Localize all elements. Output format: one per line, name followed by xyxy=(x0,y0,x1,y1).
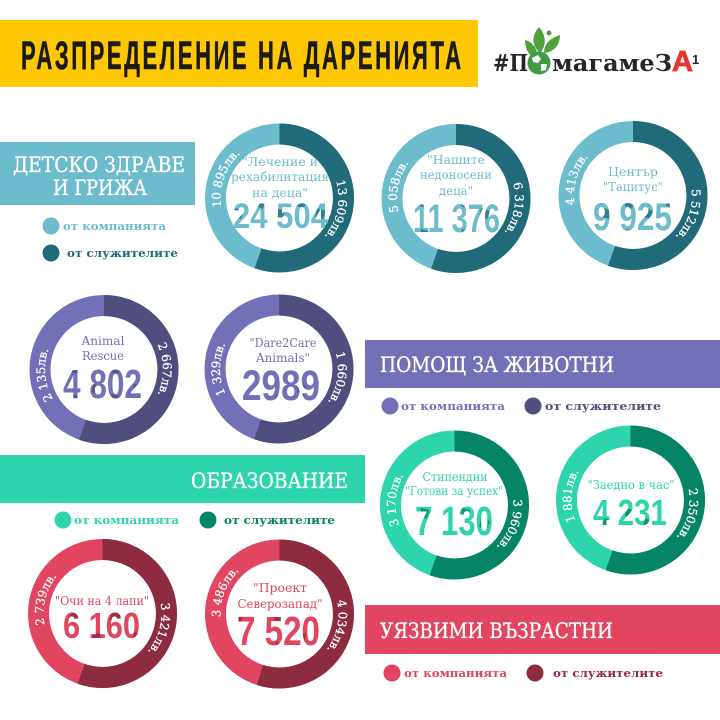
legend: child health xyxy=(42,218,178,262)
donut: Проект Северозапад: 3 486лв. xyxy=(212,570,238,616)
donut: Лечение и рехабилитация на деца: "Лечение и xyxy=(242,154,318,169)
donut: Очи на 4 лапи xyxy=(28,539,177,688)
legend: animal aid: от служителите xyxy=(545,399,661,413)
donut: Animal Rescue xyxy=(30,295,178,444)
logo: #ПомагамеЗА1: 1 xyxy=(692,52,699,67)
donut: Център Тацитус: Център xyxy=(608,164,658,179)
donut: Нашите недоносени деца: недоносени xyxy=(420,167,492,182)
title banner: РАЗПРЕДЕЛЕНИЕ НА ДАРЕНИЯТА xyxy=(21,33,461,78)
donut: Animal Rescue: Rescue xyxy=(82,348,124,363)
donut: Dare2Care Animals: 1 329лв. xyxy=(211,344,226,396)
donut: Лечение и рехабилитация на деца: 13 609лв. xyxy=(325,180,348,236)
panel: child health header: И ГРИЖА xyxy=(53,176,147,200)
legend: education xyxy=(54,512,335,528)
donut: Dare2Care Animals: 1 660лв. xyxy=(328,352,347,402)
logo: #ПомагамеЗА1: #П xyxy=(493,50,528,77)
donut: Animal Rescue: 2 135лв. xyxy=(36,350,53,402)
donut: Заедно в час: 1 881лв. xyxy=(562,472,578,522)
legend: vulnerable elderly: от служителите xyxy=(553,666,663,680)
donut: Очи на 4 лапи: 2 739лв. xyxy=(34,576,56,626)
donut: Лечение и рехабилитация на деца: 24 504 xyxy=(233,197,328,236)
title banner xyxy=(0,20,478,87)
donut: Център Тацитус: 9 925 xyxy=(593,196,672,239)
donut: Очи на 4 лапи: 6 160 xyxy=(63,605,140,646)
legend: child health: от служителите xyxy=(67,246,178,260)
legend: vulnerable elderly: от компанията xyxy=(404,666,508,680)
donut: Проект Северозапад: 4 034лв. xyxy=(327,600,348,650)
legend: education: от компанията xyxy=(74,513,180,527)
donut: Стипендии Готови за успех: 7 130 xyxy=(415,498,493,544)
legend: animal aid: от компанията xyxy=(401,399,506,413)
donut: Стипендии Готови за успех: "Готови за успех" xyxy=(405,483,503,498)
logo: #ПомагамеЗА1: магамеЗ xyxy=(552,50,672,77)
donut: Заедно в час: 4 231 xyxy=(593,492,667,533)
legend: animal aid xyxy=(382,398,661,414)
donut: Нашите недоносени деца: 11 376 xyxy=(413,197,500,241)
donut: Animal Rescue: 2 667лв. xyxy=(158,342,172,394)
donut: Dare2Care Animals: 2989 xyxy=(242,362,320,410)
donut: Стипендии Готови за успех: 3 960лв. xyxy=(497,500,522,547)
donut: Лечение и рехабилитация на деца xyxy=(205,124,354,272)
logo: #ПомагамеЗА1 xyxy=(493,27,699,78)
donut: Нашите недоносени деца xyxy=(382,124,530,273)
logo: #ПомагамеЗА1: А xyxy=(672,46,693,78)
panel: child health header xyxy=(0,142,195,205)
panel: education header: ОБРАЗОВАНИЕ xyxy=(191,469,348,493)
donut: Лечение и рехабилитация на деца: рехабилитация xyxy=(231,169,329,184)
donut: Заедно в час xyxy=(556,426,705,574)
donut: Проект Северозапад xyxy=(205,540,354,688)
donut: Център Тацитус: "Тацитус" xyxy=(603,179,663,194)
donut: Нашите недоносени деца: 5 058лв. xyxy=(388,163,408,212)
donut: Заедно в час: "Заедно в час" xyxy=(588,477,674,492)
legend: vulnerable elderly xyxy=(384,664,663,682)
donut: Animal Rescue: Animal xyxy=(81,333,124,348)
donut: Стипендии Готови за успех: 3 170лв. xyxy=(386,476,403,527)
donut: Проект Северозапад: 7 520 xyxy=(237,608,320,654)
donut: Проект Северозапад: "Проект xyxy=(253,580,307,595)
panel: animal aid header: ПОМОЩ ЗА ЖИВОТНИ xyxy=(380,353,614,377)
donut: Лечение и рехабилитация на деца: на деца" xyxy=(252,185,308,200)
donut: Dare2Care Animals: Animals" xyxy=(255,350,310,365)
donut: Очи на 4 лапи: 3 421лв. xyxy=(148,603,170,652)
donut: Dare2Care Animals: "Dare2Care xyxy=(250,335,316,350)
legend: child health: от компанията xyxy=(63,219,167,233)
donut: Animal Rescue: 4 802 xyxy=(63,361,142,407)
donut: Нашите недоносени деца: деца" xyxy=(439,183,473,198)
donut: Стипендии Готови за успех: Стипендии xyxy=(422,469,488,484)
donut: Стипендии Готови за успех xyxy=(380,430,529,580)
panel: vulnerable elderly header xyxy=(365,605,720,654)
donut: Проект Северозапад: Северозапад" xyxy=(238,596,322,611)
donut: Лечение и рехабилитация на деца: 10 895лв. xyxy=(212,153,240,206)
donut: Очи на 4 лапи: "Очи на 4 лапи" xyxy=(55,593,149,608)
panel: child health header: ДЕТСКО ЗДРАВЕ xyxy=(13,153,185,177)
donut: Център Тацитус: 4 413лв. xyxy=(565,157,588,205)
donut: Заедно в час: 2 350лв. xyxy=(677,488,698,537)
panel: education header xyxy=(0,455,365,503)
legend: education: от служителите xyxy=(224,513,335,527)
donut: Нашите недоносени деца: 6 318лв. xyxy=(504,182,524,232)
panel: animal aid header xyxy=(365,340,720,388)
donut: Център Тацитус xyxy=(558,121,708,270)
donut: Нашите недоносени деца: "Нашите xyxy=(427,152,485,167)
donut: Център Тацитус: 5 512лв. xyxy=(676,190,701,236)
panel: vulnerable elderly header: УЯЗВИМИ ВЪЗРАСТНИ xyxy=(380,619,613,643)
donut: Dare2Care Animals xyxy=(204,294,354,444)
